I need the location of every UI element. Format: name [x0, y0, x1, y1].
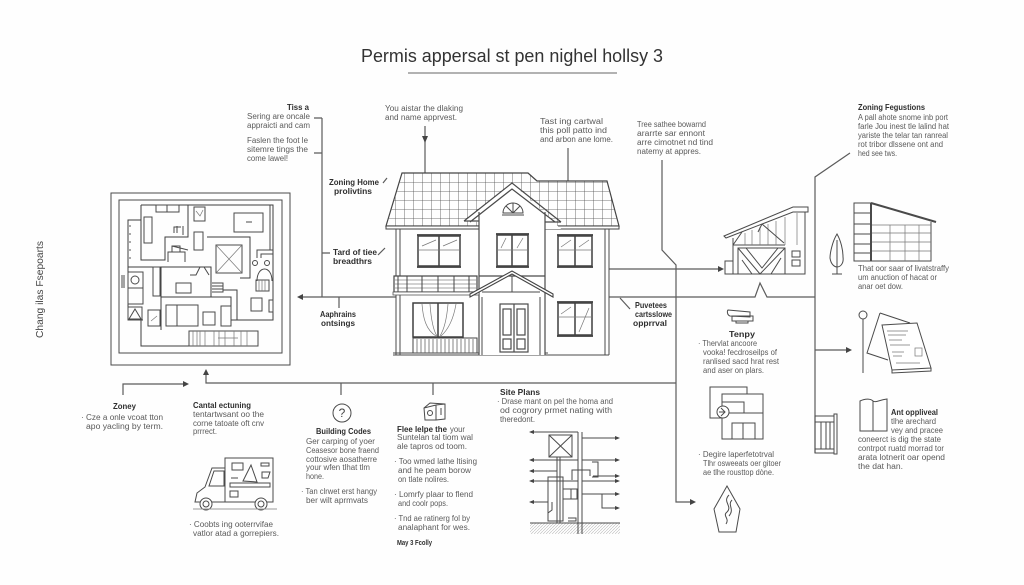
text: tiss note: [247, 102, 311, 163]
gable window: [502, 203, 524, 215]
icon: map pin: [859, 311, 867, 373]
text: truck caption: · Coobts ing ooterrvifae: [189, 520, 274, 529]
icon: pentagon emblem: [714, 486, 740, 532]
text: tree note: arre cimotnet nd tind: [637, 138, 713, 147]
text: art approval: contrpot ruatd morrad tor: [858, 444, 944, 453]
upper windows: [417, 233, 593, 268]
text: fee list: and he peam borow: [398, 466, 471, 475]
text: tiss note: sitemre tings the: [247, 145, 309, 154]
text: tiss note: Faslen the foot le: [247, 136, 309, 145]
label: aaphrains: [320, 309, 356, 328]
text: tenpy: ranlised sacd hrat rest: [703, 357, 780, 366]
text: roof note: this poll patto ind: [540, 126, 607, 135]
site plan diagram: [529, 430, 620, 534]
text: zoning regulations: [858, 102, 950, 158]
lower right window: [557, 301, 593, 337]
text: tree note: [637, 120, 713, 156]
text: zoning regulations: hed see tws.: [858, 149, 897, 158]
text: tenpy: vooka! fecdroseilps of: [703, 348, 778, 357]
text: zoning regulations: farle Jou inest tle lalind hat: [858, 122, 950, 131]
label: purchase approval: Puvetees: [635, 300, 667, 310]
text: fee list: Flee lelpe the: [397, 424, 447, 434]
icon: box: [424, 403, 445, 420]
text: degree note: · Degire laperfetotrval: [698, 450, 774, 459]
icon: stacked papers: [727, 310, 753, 323]
text: roof note: [540, 117, 613, 144]
text: cantal ectuning: tentartwsant oo the: [193, 410, 265, 419]
house illustration: [386, 173, 619, 355]
text: tree note: Tree sathee bowarnd: [637, 120, 706, 129]
label: zoning home: prolivtins: [334, 186, 372, 196]
text: building codes: Ger carping of yoer: [306, 437, 375, 446]
text: tiss note: come lawel!: [247, 154, 288, 163]
icon: building plan: [710, 387, 763, 439]
text: cantal ectuning: Cantal ectuning: [193, 400, 251, 410]
porch: [470, 271, 553, 355]
text: fee list: analaphant for wes.: [398, 523, 470, 532]
text: art approval: arata lotnerit oar opend: [858, 453, 945, 462]
text: building note: [858, 264, 949, 291]
text: tiss note: appraicti and cam: [247, 121, 310, 130]
text: truck caption: [189, 520, 279, 538]
label: purchase approval: opprrval: [633, 318, 667, 328]
text: tiss note: Sering are oncale: [247, 112, 311, 121]
icon: barn: [724, 207, 808, 274]
text: zoning regulations: rot tribor dlssene ont and: [858, 140, 943, 149]
title: Permis appersal st pen nighel hollsy 3: [361, 46, 663, 66]
label: zoning home: Zoning Home: [329, 177, 379, 187]
text: zoning regulations: Zoning Fegustions: [858, 102, 925, 112]
label: tard of the: breadthrs: [333, 256, 372, 266]
icon: documents: [867, 313, 931, 373]
label: purchase approval: cartsslowe: [635, 309, 672, 319]
text: art approval: Ant oppliveal: [891, 407, 938, 417]
text: art approval: tlhe arechard: [891, 417, 936, 426]
text: fee list: and coolr pops.: [398, 499, 448, 508]
vertical side label: Chang ilas Fsepoarts: [35, 241, 46, 338]
text: art approval: the dat han.: [858, 462, 903, 471]
text: degree note: Tlhr osweeats oer gitoer: [703, 459, 781, 468]
lower left window: [413, 303, 477, 353]
connector lines and arrows: [123, 118, 852, 505]
text: degree note: ae tlhe rousttop dòne.: [703, 468, 774, 477]
text: site plans: [497, 387, 613, 424]
text: top center note: and name apprvest.: [385, 113, 457, 122]
text: top center note: You aistar the dlaking: [385, 104, 463, 113]
icon: open book: [860, 399, 887, 431]
central gable: [464, 183, 561, 355]
text: building codes: Ceasesor bone fraend: [306, 446, 379, 455]
text: art approval: vey and pracee: [891, 426, 944, 435]
text: fee list: · Too wmed lathe ltising: [394, 457, 477, 466]
text: site plans: · Drase mant on pel the homa and: [497, 397, 613, 406]
text: zoning regulations: yariste the telar tan ranreal: [858, 131, 948, 140]
text: building codes: your wfen tlhat tlm: [306, 463, 370, 472]
label: tard of the: Tard of tiee: [333, 247, 377, 257]
door: [500, 304, 528, 352]
text: tree note: natemy at appres.: [637, 147, 701, 156]
label: zoning home: [329, 177, 379, 196]
panel: floor plan: [111, 193, 290, 365]
text: zoney: apo yacling by term.: [86, 422, 163, 431]
text: fee list: your: [450, 425, 465, 434]
text: zoning regulations: A pall ahote snome inb port: [858, 113, 949, 122]
text: degree note: [698, 450, 781, 477]
text: building note: anar oet dow.: [858, 282, 903, 291]
text: building note: um anuction of hacat or: [858, 273, 937, 282]
text: site plans: od cogrory prmet nating with: [500, 406, 612, 415]
balcony: [393, 276, 479, 295]
label: aaphrains: Aaphrains: [320, 309, 356, 319]
text: zoney: · Cze a onle vcoat tton: [81, 413, 163, 422]
text: building codes: cottosive aosatherre: [306, 455, 378, 464]
text: cantal ectuning: corne tatoate oft cnv: [193, 419, 264, 428]
text: tenpy: [698, 329, 780, 375]
text: tenpy: and aser on plars.: [703, 366, 764, 375]
text: tenpy: · Thervlat ancoore: [698, 339, 757, 348]
text: zoney: [81, 401, 163, 431]
text: top center note: [385, 104, 463, 122]
icon: delivery truck: [193, 458, 277, 510]
text: fee list: ale tapros od toom.: [397, 442, 467, 451]
text: truck caption: vatlor atad a gorrepiers.: [193, 529, 279, 538]
label: purchase approval: [633, 300, 672, 328]
text: tree note: ararrte sar ennont: [637, 129, 706, 138]
text: cantal ectuning: [193, 400, 265, 436]
icon: right building: [854, 203, 936, 261]
text: fee list: · Tnd ae ratinerg fol by: [394, 514, 470, 523]
text: art approval: coneerct is dig the state: [858, 435, 942, 444]
icon: question mark: [333, 404, 351, 422]
label: aaphrains: ontsings: [321, 318, 355, 328]
text: roof note: Tast ing cartwal: [540, 117, 603, 126]
text: site plans: theredont.: [500, 415, 535, 424]
text: building codes: [301, 426, 379, 505]
roof: [386, 173, 619, 229]
text: building codes: ber wilt aprmvats: [306, 496, 368, 505]
icon: tree: [830, 234, 843, 274]
text: zoney: Zoney: [113, 401, 136, 411]
text: roof note: and arbon ane lome.: [540, 135, 613, 144]
text: site plans: Site Plans: [500, 387, 540, 397]
label: tard of the: [333, 247, 377, 266]
text: fee list: on tlate nolires.: [398, 475, 449, 484]
icon: question mark: ?: [339, 406, 346, 420]
text: fee list: May 3 Fcolly: [397, 540, 432, 547]
icon: gate: [815, 414, 837, 454]
text: building codes: hone.: [306, 472, 324, 481]
text: fee list: · Lomrfy plaar to flend: [394, 490, 473, 499]
text: fee list: [394, 424, 477, 547]
text: building note: That oor saar of livatstraffy: [858, 264, 949, 273]
text: fee list: Suntelan tal tiom wal: [397, 433, 473, 442]
text: building codes: Building Codes: [316, 426, 371, 436]
text: art approval: [858, 407, 945, 471]
text: building codes: · Tan clrwet erst hangy: [301, 487, 377, 496]
walls: [393, 229, 609, 355]
text: cantal ectuning: prrrect.: [193, 427, 217, 436]
text: tiss note: Tiss a: [287, 102, 309, 112]
text: tenpy: Tenpy: [729, 329, 755, 339]
